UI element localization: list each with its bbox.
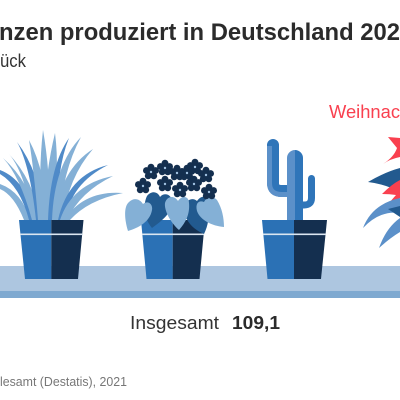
plant: cactus <box>270 145 312 220</box>
shelf <box>0 266 400 298</box>
plant: grass-like foliage <box>0 130 123 220</box>
light leaves <box>125 197 224 231</box>
plant: poinsettia <box>363 137 400 248</box>
plant: flowering plant with heart-shaped leaves <box>125 159 224 234</box>
flowers <box>135 159 217 199</box>
source: lesamt (Destatis), 2021 <box>0 374 127 389</box>
pot 2 <box>141 220 205 279</box>
title: nzen produziert in Deutschland 202 <box>0 19 400 46</box>
dark leaves <box>145 192 209 234</box>
total label: Insgesamt <box>130 313 219 333</box>
flower centres <box>142 166 210 193</box>
label: Weihnachtsstern: Weihnac <box>329 101 400 122</box>
total label: 109,1 <box>232 313 280 333</box>
subtitle: ück <box>0 50 27 71</box>
pot 1 <box>19 220 84 279</box>
total label <box>130 313 280 333</box>
pot 3 <box>262 220 327 279</box>
